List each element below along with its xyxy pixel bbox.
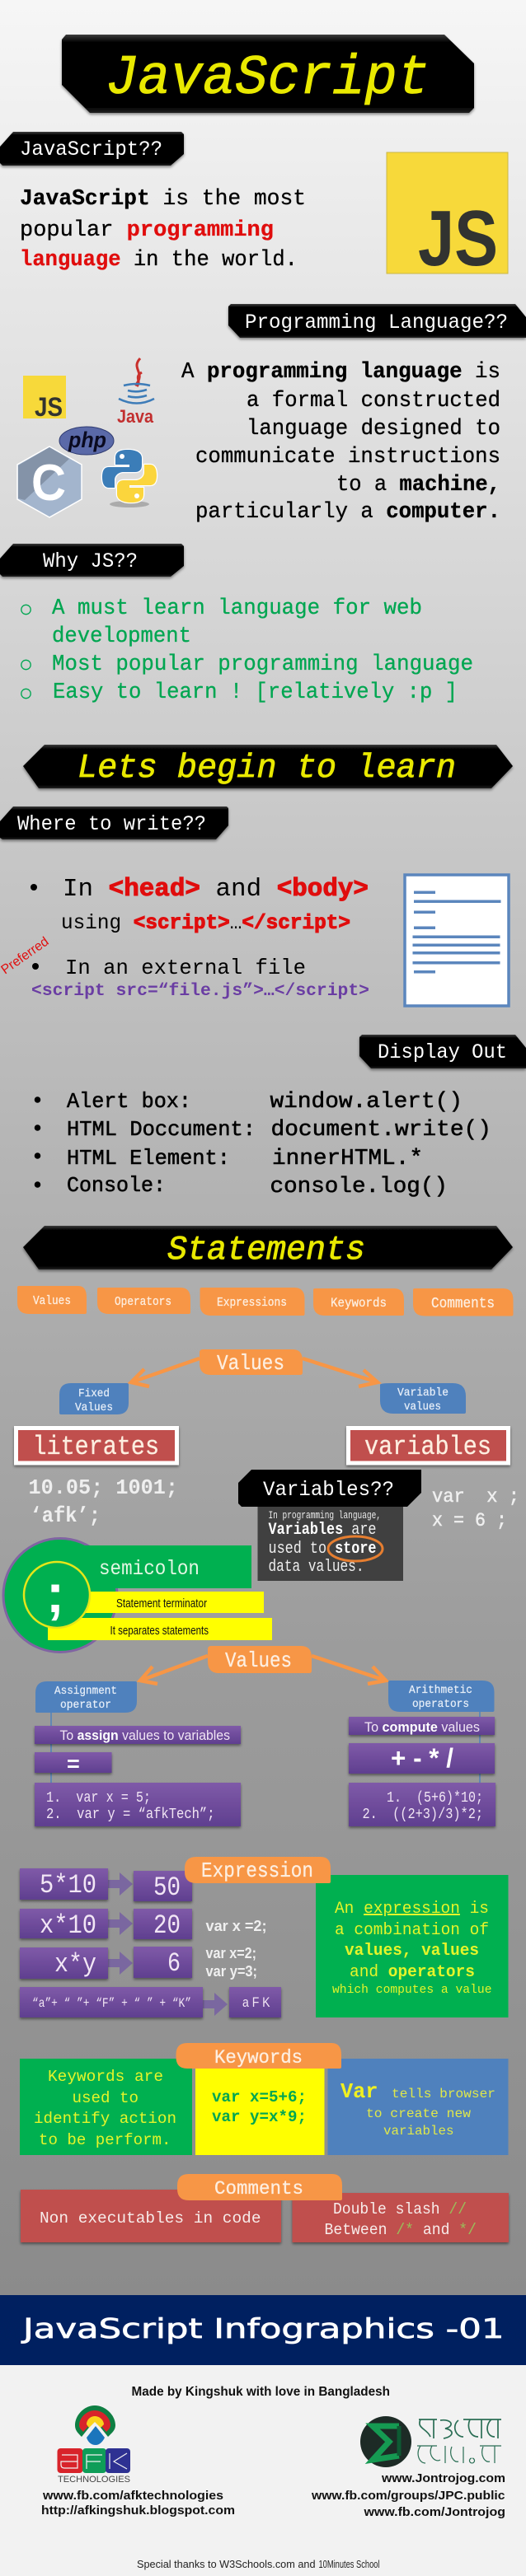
label: Arithmetic operators: operators [412, 1698, 469, 1711]
box: assignment code: 1. var x = 5; [46, 1790, 151, 1807]
box: compute description [349, 1717, 495, 1735]
box: a F K [229, 1987, 281, 2017]
list: why JS: Easy to learn ! [relatively :p ] [53, 680, 458, 705]
text: variable declarations: var x =2; [206, 1918, 267, 1934]
panel: expression definition: values, values [345, 1942, 479, 1961]
logo: Jontrojog [360, 2416, 501, 2467]
tab: Comments [413, 1288, 513, 1316]
panel: semicolon: semicolon [99, 1557, 200, 1581]
panel: expression definition: An expression is [335, 1900, 489, 1919]
panel: semicolon: ; [46, 1563, 64, 1624]
icon: PHP [59, 427, 114, 455]
tab: Expressions: Expressions [217, 1296, 287, 1310]
text: JavaScript definition [20, 187, 306, 273]
box: equals operator: = [67, 1751, 80, 1776]
box: arithmetic code: 2. ((2+3)/3)*2; [363, 1807, 483, 1823]
box: 50: 50 [153, 1872, 181, 1903]
panel: variables explanation: data values. [269, 1558, 364, 1577]
footer panel [0, 2365, 526, 2576]
box: x*10: x*10 [40, 1910, 96, 1941]
footer band title [0, 2295, 526, 2365]
arrow: values to fixed values [131, 1358, 200, 1386]
box: arithmetic code: 1. (5+6)*10; [387, 1790, 483, 1807]
panel: expression definition: which computes a value [332, 1983, 491, 1997]
title banner [62, 35, 474, 113]
tab: Operators: Operators [115, 1295, 171, 1309]
text: variable declarations [206, 1918, 267, 1980]
list: display out methods: document.write() [270, 1118, 491, 1143]
text: variable example [432, 1486, 519, 1531]
box: assign description: To assign values to variables [59, 1727, 230, 1743]
heading: Display Out: Display Out [378, 1040, 507, 1064]
panel: var keyword [328, 2059, 508, 2155]
label: Fixed Values: Fixed [78, 1387, 110, 1400]
text: where to write list: <script src=“file.js”>…</script> [31, 982, 369, 1001]
panel: variables explanation: used to store [269, 1540, 376, 1559]
text: where to write list: using <script>…</script> [61, 911, 350, 935]
special thanks: Special thanks to W3Schools.com and [137, 2558, 315, 2570]
label: Arithmetic operators: Arithmetic [409, 1684, 472, 1697]
box: 20 [134, 1909, 192, 1941]
label: Fixed Values [59, 1383, 129, 1414]
panel: keywords definition: identify action [34, 2110, 176, 2128]
panel: semicolon: Statement terminator [116, 1597, 207, 1611]
box: 50 [134, 1871, 192, 1903]
panel: expression definition: a combination of [335, 1921, 489, 1940]
section banner: Statements [23, 1226, 513, 1269]
box: 5*10: 5*10 [40, 1870, 96, 1900]
panel: keywords code [195, 2059, 325, 2155]
text: variable declarations: var x=2; [206, 1945, 256, 1961]
text: JavaScript definition: popular programming [20, 218, 274, 243]
heading: Why JS??: Why JS?? [43, 549, 138, 573]
text: variable declarations: var y=3; [206, 1963, 257, 1980]
icon: JS logo: JS [418, 194, 498, 283]
label: Variable values: Variable [397, 1386, 449, 1400]
links: AFK: http://afkingshuk.blogspot.com [41, 2504, 235, 2518]
heading: Where to write??: Where to write?? [17, 812, 206, 836]
panel: comment syntax [292, 2193, 509, 2242]
title banner: JavaScript [106, 47, 430, 110]
links: Jontrojog [311, 2471, 505, 2519]
links: Jontrojog: www.fb.com/Jontrojog [363, 2505, 505, 2519]
icon: Java [117, 358, 154, 427]
arrow: values to variable values [303, 1358, 378, 1386]
text: programming language definition: to a machine, [336, 473, 500, 498]
label: Variable values [380, 1383, 466, 1414]
box: arithmetic code [349, 1783, 495, 1826]
icon: document [405, 875, 509, 1006]
panel: var keyword: to create new [366, 2106, 471, 2121]
tab: Comments: Comments [431, 1296, 495, 1312]
box: variables: variables [364, 1432, 491, 1462]
heading: Programming Language?? [228, 304, 526, 338]
icon: Python [102, 450, 157, 507]
box: arithmetic operators: + - * / [391, 1743, 453, 1773]
connector lines [51, 1712, 480, 1783]
box: compute description: To compute values [364, 1719, 480, 1735]
box: 6: 6 [167, 1948, 181, 1979]
list: display out methods: console.log() [270, 1175, 448, 1199]
box: x*y [20, 1947, 108, 1980]
text: programming language definition: particularly a computer. [195, 500, 500, 525]
panel: non executables [21, 2190, 281, 2242]
panel: var keyword: tells browser [392, 2087, 495, 2101]
text: where to write list [31, 875, 369, 1001]
logo: AFK Technologies: TECHNOLOGIES [58, 2475, 130, 2485]
panel: variables explanation: In programming language, [269, 1509, 381, 1522]
panel: keywords definition [20, 2059, 192, 2155]
panel: keywords code: var x=5+6; [212, 2088, 307, 2106]
panel: semicolon [3, 1539, 272, 1653]
links: AFK: www.fb.com/afktechnologies [42, 2489, 223, 2503]
panel: keywords code: var y=x*9; [212, 2108, 307, 2126]
label: Variable values: values [404, 1400, 441, 1414]
list: display out methods: innerHTML.* [272, 1147, 423, 1171]
text: programming language definition: language designed to [247, 417, 500, 442]
expression examples [20, 1868, 281, 2017]
tab: Values (operators): Values [225, 1648, 292, 1673]
icon: JS logo [387, 152, 508, 283]
box: string concatenation: “a”+ “ ”+ “F” + “ ” + “K” [32, 1996, 191, 2011]
heading: JavaScript?? [0, 132, 184, 166]
text: literal examples [28, 1475, 178, 1528]
tab: Values (operators) [208, 1646, 312, 1673]
tab: Expression: Expression [201, 1858, 313, 1883]
icon: PHP: php [68, 428, 106, 452]
list: why JS: A must learn language for web [52, 596, 422, 621]
tab: Keywords [313, 1288, 404, 1316]
box: x*y: x*y [54, 1949, 96, 1980]
list: why JS [21, 596, 473, 705]
label: Fixed Values: Values [75, 1401, 113, 1414]
icon: Java: Java [117, 406, 154, 427]
text: literal examples: 10.05; 1001; [28, 1475, 178, 1500]
text: JavaScript definition: language in the world. [20, 248, 298, 273]
icon: C hexagon [17, 446, 82, 517]
tab: Operators [97, 1288, 190, 1314]
section banner: Statements: Statements [167, 1232, 365, 1269]
links: Jontrojog: www.Jontrojog.com [381, 2471, 505, 2485]
list: display out methods: HTML Doccument: [67, 1117, 256, 1142]
list: display out methods: Console: [67, 1173, 166, 1198]
text: where to write list: In an external file [65, 956, 306, 980]
panel: var keyword: variables [383, 2124, 453, 2139]
text: JavaScript definition: JavaScript is the most [20, 187, 306, 212]
label: Assignment operator: Assignment [54, 1685, 117, 1698]
tab: Values [17, 1286, 87, 1314]
credit line: Made by Kingshuk with love in Bangladesh [132, 2385, 390, 2399]
heading: JavaScript??: JavaScript?? [20, 138, 162, 161]
icon: small JS [23, 376, 66, 422]
text: variable example: var x ; [432, 1486, 519, 1508]
panel: expression definition: and operators [350, 1963, 475, 1982]
panel: expression definition [316, 1875, 508, 2017]
list: display out methods: Alert box: [67, 1089, 191, 1114]
panel: keywords definition: to be perform. [39, 2131, 171, 2149]
arrows: expression results [108, 1872, 228, 2016]
section banner: Lets begin to learn: Lets begin to learn [77, 750, 456, 788]
panel: non executables: Non executables in code [40, 2209, 261, 2228]
box: x*10 [20, 1909, 108, 1941]
special thanks: 10Minutes School [318, 2558, 380, 2570]
icons: language logos [17, 358, 157, 517]
box: 5*10 [20, 1868, 108, 1900]
tabs: statement parts [17, 1286, 513, 1316]
label: Assignment operator [35, 1681, 137, 1713]
text: programming language definition: communicate instructions [195, 445, 500, 470]
panel: variables explanation: Variables?? [263, 1478, 394, 1502]
panel: keywords definition: used to [73, 2089, 139, 2107]
section banner: Lets begin to learn [23, 745, 513, 788]
panel: semicolon: It separates statements [110, 1624, 209, 1638]
heading: Where to write?? [0, 806, 228, 839]
text: variable example: x = 6 ; [432, 1510, 507, 1531]
list: why JS: development [52, 624, 191, 649]
panel: variables explanation: Variables are [269, 1521, 376, 1540]
text: programming language definition: A programming language is [181, 360, 500, 385]
links: AFK [41, 2489, 235, 2518]
panel: comment syntax: Double slash // [333, 2200, 467, 2218]
box: equals operator [35, 1751, 112, 1776]
tab: Keywords: Keywords [331, 1296, 387, 1311]
tab: Keywords [176, 2043, 341, 2069]
icon: C hexagon: C [31, 455, 66, 512]
list: display out methods: HTML Element: [67, 1146, 230, 1171]
box: 20: 20 [153, 1910, 181, 1941]
footer band title: JavaScript Infographics -01 [21, 2312, 505, 2345]
tab: Keywords: Keywords [214, 2047, 303, 2069]
tab: Expressions [200, 1288, 305, 1316]
text: literal examples: ‘afk’; [30, 1503, 101, 1528]
arrow: values to assignment operator [140, 1656, 208, 1684]
links: Jontrojog: www.fb.com/groups/JPC.public [311, 2489, 505, 2503]
text: programming language definition: a formal constructed [247, 389, 500, 414]
arrow: values to arithmetic operators [312, 1656, 386, 1684]
box: assignment code: 2. var y = “afkTech”; [46, 1807, 214, 1823]
box: assignment code [35, 1783, 241, 1826]
box: arithmetic operators [349, 1743, 495, 1774]
panel: var keyword: Var [340, 2079, 378, 2104]
list: why JS: Most popular programming language [52, 652, 473, 677]
heading: Display Out [359, 1035, 526, 1068]
label: Assignment operator: operator [60, 1699, 111, 1712]
tab: Comments [177, 2174, 342, 2200]
list: display out methods [35, 1089, 491, 1199]
label: Preferred: Preferred [0, 934, 51, 977]
text: where to write list: In <head> and <body> [63, 875, 369, 904]
box: a F K: a F K [242, 1994, 270, 2010]
list: display out methods: window.alert() [270, 1090, 463, 1115]
panel: comment syntax: Between /* and */ [325, 2221, 477, 2239]
panel: variables explanation [238, 1470, 421, 1581]
tab: Values: Values [217, 1351, 284, 1376]
heading: Programming Language??: Programming Language?? [245, 311, 508, 334]
icon: small JS: JS [35, 392, 63, 422]
box: string concatenation [20, 1987, 203, 2017]
logo: AFK Technologies [58, 2405, 130, 2485]
box: literates: literates [33, 1432, 159, 1462]
label: Arithmetic operators [388, 1681, 495, 1712]
box: 6 [134, 1947, 192, 1979]
tab: Values: Values [33, 1294, 71, 1308]
heading: Why JS?? [0, 544, 184, 577]
text: programming language definition [181, 360, 500, 525]
panel: keywords definition: Keywords are [48, 2068, 163, 2086]
tab: Comments: Comments [214, 2178, 303, 2200]
